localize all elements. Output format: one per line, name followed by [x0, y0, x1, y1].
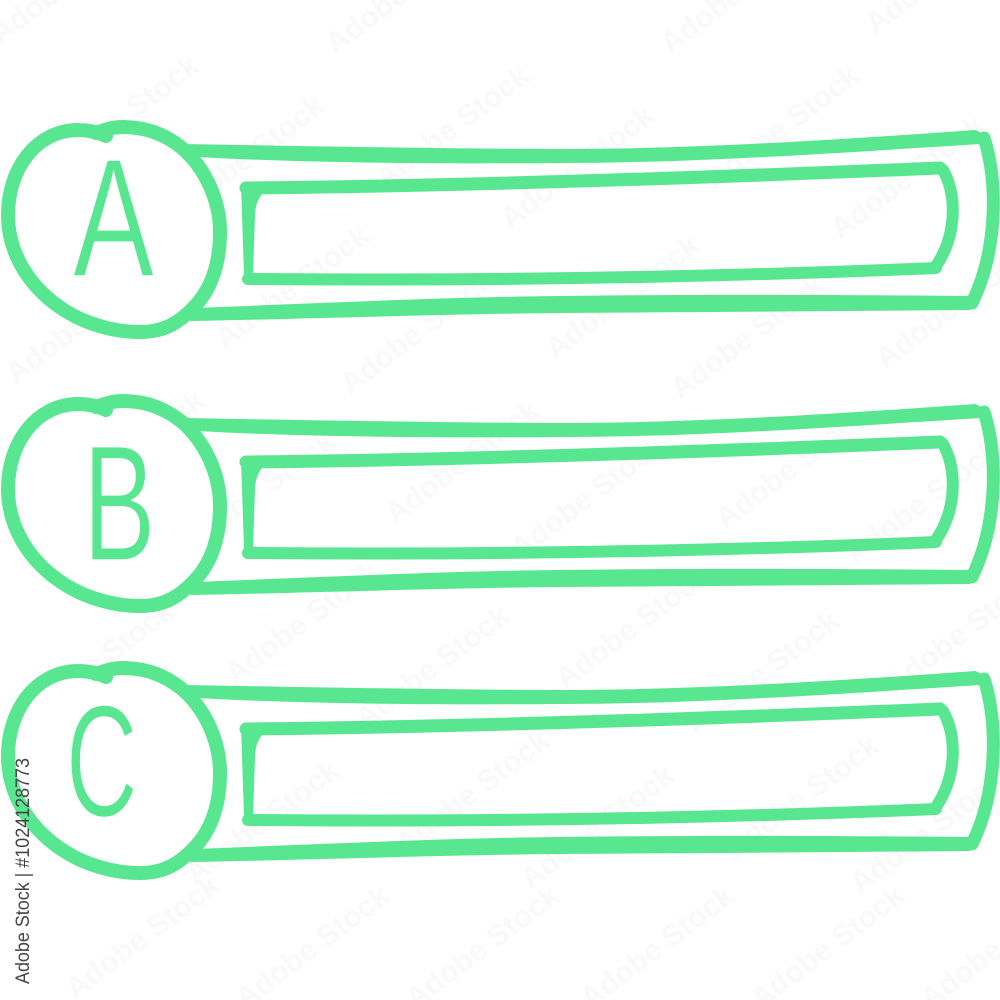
watermark pattern: Adobe Stock	[179, 754, 346, 891]
watermark pattern: Adobe Stock	[664, 269, 831, 406]
watermark pattern: Adobe Stock	[39, 49, 206, 186]
banner A	[8, 125, 993, 332]
watermark pattern: Adobe Stock	[679, 604, 846, 741]
watermark pattern: Adobe Stock	[514, 759, 681, 896]
watermark pattern: Adobe Stock	[494, 99, 661, 236]
stock id caption: Adobe Stock | #1024128773	[13, 758, 34, 984]
watermark pattern: Adobe Stock	[209, 219, 376, 356]
watermark pattern: Adobe Stock	[824, 109, 991, 246]
banner C	[8, 668, 993, 873]
letter C: C	[66, 673, 138, 851]
letter B: B	[83, 411, 156, 595]
watermark pattern: Adobe Stock	[369, 59, 536, 196]
watermark pattern: Adobe Stock	[504, 429, 671, 566]
watermark pattern: Adobe Stock	[54, 719, 221, 856]
watermark pattern: Adobe Stock	[349, 599, 516, 736]
watermark pattern: Adobe Stock	[14, 594, 181, 731]
watermark pattern: Adobe Stock	[709, 399, 876, 536]
watermark pattern: Adobe Stock	[379, 394, 546, 531]
banner B	[8, 401, 993, 606]
watermark pattern: Adobe Stock	[164, 89, 331, 226]
watermark pattern: Adobe Stock	[549, 559, 716, 696]
watermark pattern: Adobe Stock	[699, 59, 866, 196]
watermark pattern: Adobe Stock	[389, 724, 556, 861]
watermark pattern: Adobe Stock	[174, 424, 341, 561]
watermark pattern: Adobe Stock	[719, 729, 886, 866]
watermark pattern: Adobe Stock	[219, 554, 386, 691]
letter A: A	[73, 125, 154, 313]
watermark pattern: Adobe Stock	[0, 254, 166, 391]
watermark pattern: Adobe Stock	[539, 229, 706, 366]
watermark pattern: Adobe Stock	[334, 264, 501, 401]
watermark pattern: Adobe Stock	[44, 384, 211, 521]
